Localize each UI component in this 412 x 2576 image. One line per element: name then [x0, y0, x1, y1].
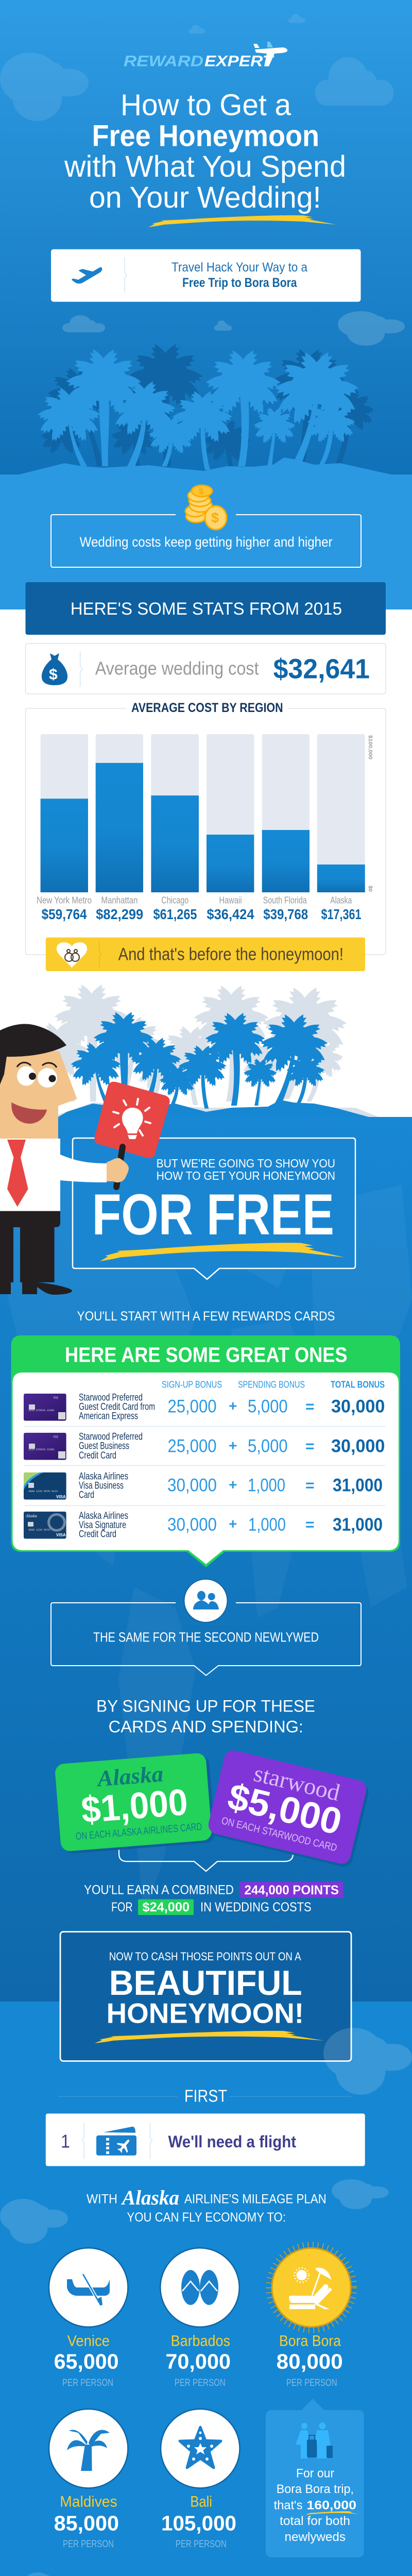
row: Starwood Preferred Guest Business Credit Card: +: [229, 1437, 237, 1453]
row: Alaska Airlines Visa Business Card: 1,000: [248, 1476, 285, 1496]
row: Alaska Airlines Visa Signature Credit Card: 31,000: [333, 1515, 383, 1535]
text: combined points: IN WEDDING COSTS: [200, 1900, 312, 1914]
callout: 160,000 total: total for both: [280, 2514, 350, 2528]
icon: beach chair: [289, 2267, 332, 2309]
panel: average cost by region: [26, 701, 386, 955]
row: Alaska Airlines Visa Business Card: [24, 1471, 383, 1500]
text: combined points: FOR: [111, 1900, 133, 1914]
text: Alaska mileage plan: WITH: [87, 2192, 117, 2207]
face: [0, 1051, 77, 1139]
destination: Venice: Venice: [67, 2333, 110, 2349]
bar chart: $61,265: [153, 906, 197, 922]
subtitle card: Travel Hack Your Way to a: [171, 260, 307, 275]
palm island illustration: [0, 342, 412, 479]
destination: Venice: 65,000: [54, 2350, 119, 2374]
bar chart: $100,000: [367, 735, 373, 759]
title: Free Honeymoon: [92, 120, 319, 153]
title: How to Get a: [121, 89, 291, 122]
row: Alaska Airlines Visa Business Card: Alaska Airlines: [79, 1471, 128, 1482]
bar chart: $82,299: [96, 906, 143, 922]
icon: couple with luggage: [296, 2422, 333, 2459]
text: signing up: CARDS AND SPENDING:: [109, 1717, 303, 1736]
step 1: flight: We'll need a flight: [168, 2132, 296, 2151]
icon: gondola: [67, 2274, 110, 2306]
bar chart: Alaska: [330, 895, 352, 906]
palm island on white: [26, 982, 379, 1117]
icon: couple: [183, 1579, 228, 1623]
text: Alaska mileage plan: [87, 2186, 327, 2225]
destination: Maldives: [48, 2409, 129, 2550]
destination: Barbados: [160, 2247, 240, 2388]
destination: Bali: Bali: [190, 2494, 212, 2511]
row: Starwood Preferred Guest Business Credit Card: Credit Card: [79, 1450, 116, 1461]
row: Starwood Preferred Guest Credit Card: 5,000: [248, 1397, 288, 1417]
row: Alaska Airlines Visa Signature Credit Card: Alaska: [25, 1514, 37, 1518]
text: combined points: [84, 1882, 343, 1915]
bar chart: $0: [367, 886, 373, 892]
destination: Bali: [160, 2409, 241, 2550]
bar chart: $59,764: [42, 906, 87, 922]
row: Starwood Preferred Guest Business Credit Card: 25,000: [168, 1436, 216, 1456]
bar chart: South Florida: [263, 895, 307, 906]
text: combined points: 244,000 POINTS: [244, 1883, 339, 1897]
row: Alaska Airlines Visa Signature Credit Card: [24, 1511, 383, 1540]
row: Alaska Airlines Visa Signature Credit Card: 4000 1234 5678: [28, 1529, 50, 1532]
bar chart: Chicago: [161, 895, 188, 906]
icon: flip flops: [181, 2270, 218, 2305]
title: on Your Wedding!: [89, 181, 321, 214]
destination: Bora Bora: 80,000: [277, 2350, 343, 2374]
logo: EXPERT: [204, 53, 274, 70]
row: Alaska Airlines Visa Business Card: VISA: [56, 1495, 66, 1499]
row: Alaska Airlines Visa Business Card: =: [305, 1477, 315, 1494]
bar chart: Manhattan: [101, 895, 138, 906]
title underline stroke: [148, 215, 336, 227]
destination: Bali: 105,000: [161, 2511, 236, 2535]
row: Alaska Airlines Visa Business Card: Visa Business: [79, 1480, 124, 1491]
panel: average wedding cost: [26, 643, 386, 694]
row: Alaska Airlines Visa Business Card: 30,000: [167, 1476, 217, 1496]
callout: 160,000 total: 160,000: [306, 2499, 356, 2513]
callout: 160,000 total: For our: [296, 2467, 334, 2481]
callout: before the honeymoon: [46, 938, 365, 971]
icon: heart with rings: [57, 942, 87, 968]
destination: Maldives: 85,000: [54, 2511, 119, 2535]
row: Alaska Airlines Visa Signature Credit Card: +: [229, 1516, 237, 1532]
clouds: lower sky: [0, 2028, 412, 2576]
title: [64, 89, 346, 214]
text: rewards cards intro: YOU'LL START WITH A FEW REWARDS CARDS: [77, 1309, 335, 1324]
heading: beautiful honeymoon: [60, 1932, 351, 2061]
row: Alaska Airlines Visa Signature Credit Card: Credit Card: [79, 1529, 116, 1540]
logo: REWARD: [124, 53, 203, 70]
card: Alaska $1,000: $1,000: [80, 1782, 189, 1831]
destination: Venice: PER PERSON: [62, 2378, 113, 2388]
row: Alaska Airlines Visa Signature Credit Card: 30,000: [167, 1515, 217, 1535]
callout: 160,000 total: newlyweds: [284, 2530, 346, 2544]
callout: for free: [73, 1138, 355, 1279]
destination: Barbados: Barbados: [171, 2333, 230, 2349]
heading: stats: HERE'S SOME STATS FROM 2015: [71, 599, 342, 619]
row: Alaska Airlines Visa Signature Credit Card: =: [305, 1516, 315, 1533]
callout: for free: HOW TO GET YOUR HONEYMOON: [157, 1169, 335, 1182]
text: Alaska mileage plan: AIRLINE'S MILEAGE PLAN: [184, 2192, 327, 2207]
callout: for free: FOR FREE: [92, 1182, 334, 1247]
icon: money bag: [42, 653, 67, 685]
card: Starwood $5,000: $5,000: [224, 1776, 346, 1843]
subtitle card: [51, 249, 360, 302]
callout: second newlywed: [51, 1579, 361, 1675]
character: man with idea sign: [0, 1024, 170, 1295]
row: Starwood Preferred Guest Credit Card: 3159 876543 21001: [28, 1409, 55, 1412]
row: Starwood Preferred Guest Business Credit Card: [24, 1432, 385, 1461]
row: Alaska Airlines Visa Business Card: 4000 1234 5678 9123: [28, 1490, 58, 1493]
row: Starwood Preferred Guest Credit Card: Starwood Preferred: [79, 1392, 143, 1403]
connector bracket: [119, 1844, 293, 1871]
heading: stats: [26, 582, 386, 635]
shirt: [0, 1139, 107, 1211]
destination: Maldives: Maldives: [60, 2494, 117, 2511]
heading: beautiful honeymoon: HONEYMOON!: [107, 1997, 304, 2029]
heading: beautiful honeymoon: BEAUTIFUL: [109, 1963, 302, 2003]
destination: Bora Bora: PER PERSON: [286, 2378, 337, 2388]
table headers: SIGN-UP BONUS: [162, 1380, 222, 1390]
row: Starwood Preferred Guest Business Credit Card: =: [305, 1438, 315, 1455]
panel: great cards: HERE ARE SOME GREAT ONES: [65, 1343, 347, 1367]
text: Alaska mileage plan: YOU CAN FLY ECONOMY TO:: [127, 2210, 286, 2225]
row: Alaska Airlines Visa Business Card: +: [229, 1477, 237, 1493]
background: world map texture: [0, 1154, 412, 1917]
step 1: flight: [46, 2113, 365, 2166]
icon: coins: [185, 485, 227, 530]
card: Alaska $1,000: Alaska: [95, 1761, 164, 1792]
destination: Bora Bora: [269, 2245, 354, 2388]
text: combined points: $24,000: [142, 1900, 190, 1914]
card: Starwood $5,000: starwood: [251, 1760, 342, 1806]
destination: Barbados: 70,000: [165, 2350, 231, 2374]
bar chart: New York Metro: [37, 895, 92, 906]
callout: wedding costs: Wedding costs keep getting higher and higher: [80, 534, 333, 550]
text: Alaska mileage plan: Alaska: [121, 2186, 179, 2209]
beach: [0, 457, 412, 479]
row: Starwood Preferred Guest Credit Card: 25,000: [168, 1397, 216, 1417]
icon: ticket: [96, 2127, 136, 2156]
table headers: [162, 1380, 385, 1390]
callout: 160,000 total: that's: [274, 2499, 303, 2513]
panel: average cost by region: AVERAGE COST BY REGION: [131, 701, 283, 715]
text: combined points: YOU'LL EARN A COMBINED: [84, 1883, 234, 1897]
bar chart: $36,424: [207, 906, 254, 922]
destination: Venice: [48, 2247, 129, 2388]
callout: before the honeymoon: And that's before the honeymoon!: [118, 945, 344, 964]
row: Starwood Preferred Guest Credit Card: =: [305, 1398, 315, 1415]
icon: palm tree: [67, 2430, 110, 2471]
card: Starwood $5,000: ON EACH STARWOOD CARD: [220, 1815, 338, 1854]
row: Starwood Preferred Guest Credit Card: American Express: [79, 1411, 138, 1422]
step 1: flight: 1: [61, 2131, 70, 2152]
row: Alaska Airlines Visa Signature Credit Card: VISA: [56, 1533, 66, 1537]
bar chart: $39,768: [263, 906, 308, 922]
destination: Maldives: PER PERSON: [63, 2539, 114, 2550]
icon: coins: $: [211, 510, 219, 526]
section heading: first: FIRST: [184, 2087, 227, 2106]
row: Alaska Airlines Visa Signature Credit Card: Visa Signature: [79, 1520, 126, 1531]
clouds: header: [0, 14, 405, 346]
callout: 160,000 total: Bora Bora trip,: [277, 2482, 354, 2496]
row: Alaska Airlines Visa Signature Credit Card: 1,000: [248, 1515, 286, 1535]
card: Starwood $5,000: [206, 1749, 371, 1869]
bar chart: Hawaii: [219, 895, 242, 906]
heading: beautiful honeymoon: NOW TO CASH THOSE POINTS OUT ON A: [109, 1950, 301, 1963]
table headers: SPENDING BONUS: [238, 1380, 305, 1390]
destination: Bali: PER PERSON: [176, 2539, 227, 2550]
icon: money bag: $: [49, 666, 58, 683]
icon: coins: $: [199, 487, 203, 496]
row: Alaska Airlines Visa Business Card: 31,000: [333, 1476, 383, 1496]
logo: [124, 42, 287, 70]
card: Alaska $1,000: ON EACH ALASKA AIRLINES CARD: [75, 1821, 202, 1842]
destination: Bora Bora: Bora Bora: [279, 2333, 341, 2349]
row: Starwood Preferred Guest Credit Card: +: [229, 1398, 237, 1414]
panel: average wedding cost: Average wedding cost: [95, 657, 259, 679]
row: Starwood Preferred Guest Credit Card: 30,000: [331, 1397, 385, 1417]
row: Starwood Preferred Guest Business Credit Card: 30,000: [331, 1436, 385, 1456]
row: Alaska Airlines Visa Business Card: Card: [79, 1489, 94, 1500]
background: sky section: [0, 2002, 412, 2576]
idea sign: [94, 1082, 170, 1187]
card: Alaska $1,000: [55, 1752, 216, 1854]
row: Starwood Preferred Guest Business Credit Card: 5,000: [248, 1436, 288, 1456]
panel: great cards: [11, 1335, 400, 1567]
background: top sky gradient: [0, 0, 412, 474]
row: Starwood Preferred Guest Business Credit Card: 3159 876543 21001: [28, 1448, 55, 1451]
table headers: TOTAL BONUS: [331, 1380, 385, 1390]
callout: wedding costs: [51, 485, 361, 567]
panel: average wedding cost: $32,641: [273, 654, 370, 685]
text: signing up: BY SIGNING UP FOR THESE: [96, 1697, 315, 1715]
subtitle card: Free Trip to Bora Bora: [182, 276, 297, 290]
row: Starwood Preferred Guest Credit Card: Guest Credit Card from: [79, 1401, 155, 1412]
legs: [0, 1211, 72, 1295]
callout: 160,000 total: [266, 2399, 364, 2557]
destination: Barbados: PER PERSON: [175, 2378, 226, 2388]
text: signing up: [96, 1697, 315, 1736]
row: Starwood Preferred Guest Business Credit Card: Guest Business: [79, 1441, 129, 1452]
background: blue section: [0, 1117, 412, 2002]
row: Starwood Preferred Guest Business Credit Card: Starwood Preferred: [79, 1432, 143, 1443]
row: Starwood Preferred Guest Business Credit Card: spg: [53, 1434, 58, 1438]
row: Alaska Airlines Visa Signature Credit Card: Alaska Airlines: [79, 1511, 128, 1521]
title: with What You Spend: [64, 150, 346, 183]
row: Starwood Preferred Guest Credit Card: spg: [53, 1395, 58, 1399]
bar chart: [37, 734, 373, 922]
row: Starwood Preferred Guest Credit Card: [24, 1392, 385, 1422]
icon: starfish: [180, 2427, 221, 2468]
icon: plane: [72, 267, 102, 283]
callout: for free: BUT WE'RE GOING TO SHOW YOU: [157, 1157, 335, 1170]
background: beach band: [0, 474, 412, 609]
bar chart: $17,361: [321, 906, 362, 922]
callout: second newlywed: THE SAME FOR THE SECOND NEWLYWED: [93, 1629, 319, 1645]
